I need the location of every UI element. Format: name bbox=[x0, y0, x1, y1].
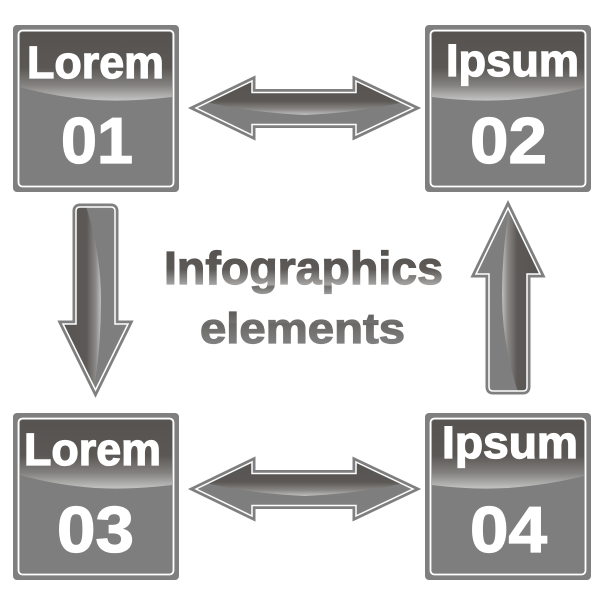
number: 02: 02 bbox=[470, 104, 547, 177]
panel: Lorem 03 bbox=[13, 413, 179, 580]
heading: Lorem: Lorem bbox=[27, 37, 164, 88]
panel: Lorem 01 bbox=[13, 25, 179, 192]
arrow: double-headed top bbox=[190, 75, 420, 135]
subtitle: elements: elements bbox=[200, 305, 405, 353]
title: Infographics: Infographics bbox=[164, 242, 443, 294]
number: 03: 03 bbox=[57, 493, 134, 566]
number: 04: 04 bbox=[470, 493, 547, 566]
number: 01: 01 bbox=[61, 104, 133, 177]
heading: Ipsum: Ipsum bbox=[446, 35, 579, 86]
heading: Lorem: Lorem bbox=[24, 424, 161, 475]
arrow: double-headed bottom bbox=[190, 456, 420, 516]
panel: Ipsum 04 bbox=[425, 413, 591, 580]
arrow: up bbox=[476, 203, 545, 395]
heading: Ipsum: Ipsum bbox=[442, 417, 578, 468]
arrow: down bbox=[60, 200, 128, 395]
panel: Ipsum 02 bbox=[425, 25, 591, 192]
